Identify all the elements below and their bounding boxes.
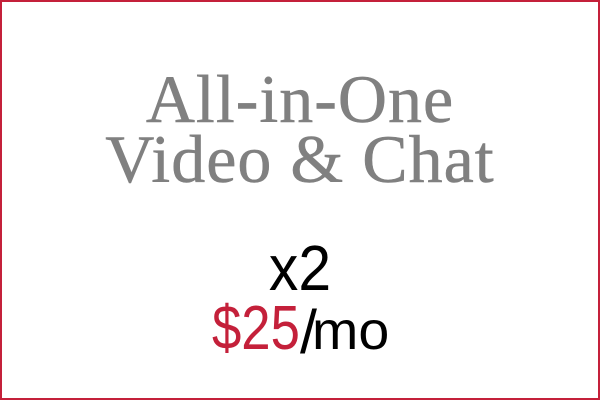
title: line 1: All-in-One	[146, 61, 454, 137]
price	[212, 294, 389, 366]
price amount: $25	[212, 294, 300, 362]
per month slash: /	[300, 298, 317, 366]
per month unit: mo	[312, 301, 389, 361]
quantity: x2	[269, 232, 331, 304]
title: line 2: Video & Chat	[105, 121, 495, 197]
